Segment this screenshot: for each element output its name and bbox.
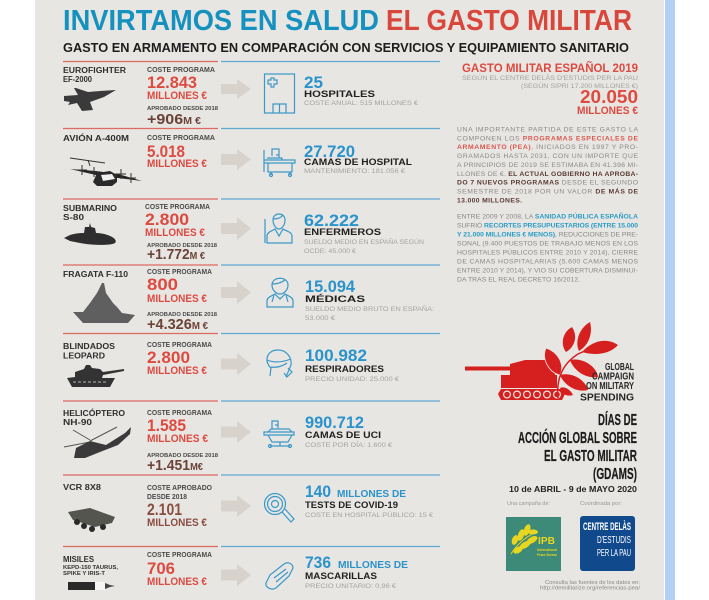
row: A400M	[63, 134, 412, 186]
cost: VCR: DESDE 2018	[147, 494, 187, 501]
logo: Centre Delàs: D'ESTUDIS	[597, 534, 631, 546]
icon: frigate	[73, 283, 135, 323]
blue side band	[665, 0, 675, 600]
organisers captions	[507, 501, 622, 507]
text block: armament programmes	[457, 126, 638, 204]
heading: days of global action: EL GASTO MILITAR	[544, 448, 637, 465]
logo wordmark: GLOBAL	[605, 362, 634, 373]
icon: armoured vehicle	[68, 508, 115, 532]
cost: Eurofighter: APROBADO DESDE 2018	[147, 106, 218, 112]
label: submarine: SUBMARINO	[63, 204, 117, 213]
equivalent: masks: PRECIO UNITARIO: 0,96 €	[305, 583, 396, 590]
equivalent: hospitals: HOSPITALES	[304, 89, 375, 100]
cost: missiles: 706	[147, 559, 175, 578]
equivalent: masks	[305, 553, 408, 590]
equivalent: COVID tests: COSTE EN HOSPITAL PÚBLICO: 15 €	[305, 510, 433, 519]
panel: Spanish military spending 2019: (SEGÚN SIPRI 17.200 MILLONES €)	[521, 81, 638, 90]
equivalent: nurses: ENFERMEROS	[304, 227, 381, 238]
icon: helicopter	[64, 427, 131, 458]
cost: A400M	[147, 135, 215, 170]
cost: Eurofighter: +906M €	[147, 111, 201, 128]
row: Leopard tank	[63, 342, 399, 387]
cost: Leopard	[147, 342, 212, 377]
title: EL GASTO MILITAR	[386, 5, 632, 37]
icon: ICU bed	[264, 421, 294, 448]
cost: missiles	[147, 552, 212, 588]
label: Leopard: BLINDADOS	[63, 342, 116, 351]
heading: days of global action: (GDAMS)	[593, 466, 637, 483]
icon: transport plane	[70, 158, 142, 186]
label: helicopter	[63, 409, 125, 427]
arrow	[221, 149, 251, 170]
cost: frigate: APROBADO DESDE 2018	[147, 312, 217, 318]
organisers captions: Una campaña de:	[507, 501, 550, 507]
equivalent: ICU beds: COSTE POR DÍA: 1.600 €	[305, 440, 392, 449]
logo: IPB: IPB	[538, 536, 555, 547]
icon: face mask	[266, 563, 293, 589]
logo: IPB	[506, 517, 561, 571]
text block: public health cuts: DE CAMAS HOSPITALARIAS (5.600 CAMAS MENOS	[457, 258, 638, 266]
organisers captions: Coordinada por:	[580, 501, 622, 507]
label: Eurofighter	[63, 66, 126, 84]
icon: magnifier	[264, 494, 294, 522]
sources note: http://demilitarize.org/referencias-pea/	[540, 586, 641, 592]
cost: helicopter	[147, 410, 218, 474]
row: frigate	[63, 269, 434, 333]
cost: missiles: COSTE PROGRAMA	[147, 552, 212, 559]
cost: submarine: APROBADO DESDE 2018	[147, 243, 217, 249]
icon: hospital	[264, 74, 294, 113]
text block: armament programmes: GRAMADOS HASTA 2031, CON UN IMPORTE QUE	[457, 153, 638, 160]
cost: helicopter: APROBADO DESDE 2018	[147, 453, 218, 459]
equivalent: doctors: 53.000 €	[305, 315, 335, 322]
equivalent: COVID tests: TESTS DE COVID-19	[305, 500, 398, 511]
equivalent: nurses	[304, 211, 424, 255]
cost: submarine: MILLONES €	[145, 227, 205, 239]
label: helicopter: HELICÓPTERO	[63, 409, 125, 418]
equivalent: doctors	[305, 277, 434, 322]
logo wordmark: CAMPAIGN	[592, 372, 634, 382]
heading: days of global action: DÍAS DE	[598, 410, 637, 429]
icon: submarine	[64, 223, 116, 245]
title: INVIRTAMOS EN SALUD	[63, 5, 379, 37]
label: missiles	[63, 555, 119, 577]
panel: Spanish military spending 2019: MILLONES €	[577, 105, 638, 117]
text block: public health cuts: DA TRAS EL REAL DECRETO 16/2012.	[457, 276, 580, 284]
row: missiles	[63, 552, 408, 590]
icon: nurse	[265, 214, 292, 243]
subtitle: GASTO EN ARMAMENTO EN COMPARACIÓN CON SERVICIOS Y EQUIPAMIENTO SANITARIO	[63, 40, 629, 55]
cost: frigate: MILLONES €	[147, 293, 207, 305]
logo: Centre Delàs	[580, 516, 635, 571]
arrow	[221, 421, 251, 443]
cost: helicopter: COSTE PROGRAMA	[147, 410, 212, 417]
cost: Leopard: MILLONES €	[147, 365, 207, 377]
text block: public health cuts: HOSPITALES PÚBLICOS ENTRE 2010 Y 2014), CIERRE	[457, 248, 638, 256]
icon: tank	[67, 365, 124, 387]
equivalent: COVID tests: MILLONES DE	[337, 489, 406, 500]
equivalent: hospitals: 25	[304, 73, 323, 92]
label: Leopard: LEOPARD	[63, 352, 105, 360]
cost: VCR: MILLONES €	[147, 517, 207, 529]
cost: frigate: 800	[147, 275, 178, 294]
title	[63, 5, 632, 37]
text block: public health cuts: SONAL (9.400 PUESTOS DE TRABAJO MENOS EN LOS	[457, 240, 638, 248]
equivalent: hospitals: COSTE ANUAL: 515 MILLONES €	[304, 100, 418, 107]
heading: days of global action	[518, 410, 637, 483]
cost: Eurofighter: 12.843	[147, 73, 197, 92]
equivalent: nurses: 62.222	[304, 211, 359, 230]
equivalent: masks: MASCARILLAS	[305, 571, 377, 582]
cost: helicopter: 1.585	[147, 416, 186, 435]
label: helicopter: NH-90	[63, 418, 93, 427]
cost: helicopter: MILLONES €	[147, 433, 208, 445]
arrow	[221, 79, 251, 99]
icon: hospital bed	[264, 149, 295, 176]
cost: frigate: +4.326M €	[147, 316, 208, 333]
equivalent: hospital beds: 27.720	[304, 142, 355, 161]
label: Eurofighter: EF-2000	[63, 75, 93, 84]
equivalent: masks: 736	[305, 553, 331, 572]
text block: public health cuts: ENTRE 2009 Y 2008, LA SANIDAD PÚBLICA ESPAÑOLA	[457, 212, 638, 220]
equivalent: doctors: SUELDO MEDIO BRUTO EN ESPAÑA:	[305, 304, 434, 313]
cost: VCR	[147, 485, 213, 529]
cost: Eurofighter	[147, 67, 218, 128]
arrow	[221, 495, 251, 517]
text block: armament programmes: UNA IMPORTANTE PARTIDA DE ESTE GASTO LA	[457, 126, 638, 134]
text block: armament programmes: A PRINCIPIOS DE 2019 SE ESTIMABA EN 41.396 MI-	[457, 162, 638, 169]
logo: IPB: International	[537, 548, 557, 552]
cost: Eurofighter: MILLONES €	[147, 90, 207, 102]
logo wordmark	[580, 362, 634, 404]
text block: armament programmes: 13.000 MILLONES.	[457, 197, 522, 204]
cost: A400M: COSTE PROGRAMA	[147, 135, 215, 142]
equivalent: nurses: OCDE: 45.000 €	[304, 248, 356, 255]
icon: missile	[68, 582, 115, 590]
equivalent: COVID tests: 140	[305, 482, 331, 501]
icon: red tank with olive branch	[465, 322, 618, 400]
cost: A400M: MILLONES €	[147, 158, 207, 170]
text block: public health cuts: SUFRIÓ RECORTES PRESUPUESTARIOS (ENTRE 15.000	[457, 220, 638, 230]
text block: public health cuts	[457, 212, 638, 284]
panel: Spanish military spending 2019: SEGÚN EL CENTRE DELÀS D'ESTUDIS PER LA PAU	[462, 73, 638, 82]
cost: submarine	[145, 204, 217, 263]
equivalent: ICU beds	[305, 413, 392, 449]
label: Eurofighter: EUROFIGHTER	[63, 66, 126, 75]
cost: Leopard: COSTE PROGRAMA	[147, 342, 212, 349]
cost: helicopter: +1.451M€	[147, 457, 203, 474]
label: missiles: KEPD-150 TAURUS,	[63, 565, 119, 571]
text block: armament programmes: LLONES DE €. EL ACTUAL GOBIERNO HA APROBA-	[457, 171, 638, 178]
cost: submarine: 2.800	[145, 210, 189, 229]
label: frigate: FRAGATA F-110	[63, 270, 129, 279]
cost: A400M: 5.018	[147, 142, 185, 161]
cost: submarine: COSTE PROGRAMA	[145, 204, 210, 211]
logo wordmark: SPENDING	[580, 392, 634, 404]
dates: 10 de ABRIL - 9 de MAYO 2020	[509, 484, 637, 494]
equivalent: doctors: MÉDICAS	[305, 294, 365, 305]
text block: armament programmes: DO 7 NUEVOS PROGRAMAS DESDE EL SEGUNDO	[457, 180, 638, 187]
equivalent: hospital beds: MANTENIMIENTO: 181.056 €	[304, 168, 405, 175]
label: missiles: SPIKE Y IRIS-T	[63, 571, 105, 577]
logo: Global Campaign on Military Spending	[465, 322, 634, 404]
panel: Spanish military spending 2019: GASTO MILITAR ESPAÑOL 2019	[462, 62, 638, 75]
label: missiles: MISILES	[63, 555, 95, 564]
cost: VCR: 2.101	[147, 500, 182, 519]
equivalent: hospital beds: CAMAS DE HOSPITAL	[304, 157, 412, 168]
icon: respirator	[267, 350, 292, 377]
equivalent: respirators: PRECIO UNIDAD: 25.000 €	[305, 376, 399, 383]
arrow	[221, 281, 251, 304]
sources note: Consulta las fuentes de los datos en:	[545, 580, 640, 586]
label: A400M: AVIÓN A-400M	[63, 134, 129, 143]
cost: missiles: MILLONES €	[147, 576, 207, 588]
label: submarine: S-80	[63, 213, 85, 222]
sources note	[540, 580, 641, 592]
row: Eurofighter	[63, 66, 418, 128]
panel: Spanish military spending 2019	[462, 62, 638, 117]
row: helicopter	[63, 409, 392, 474]
cost: submarine: +1.772M €	[147, 246, 205, 263]
equivalent: hospitals	[304, 73, 418, 107]
label: Leopard	[63, 342, 116, 360]
icon: doctor	[267, 278, 293, 307]
equivalent: doctors: 15.094	[305, 277, 356, 296]
icon: fighter jet	[64, 88, 116, 111]
arrow	[221, 564, 251, 586]
equivalent: hospital beds	[304, 142, 412, 175]
text block: public health cuts: Y 21.000 MILLONES € MENOS), REDUCCIONES DE PRE-	[457, 232, 638, 238]
logo: Centre Delàs: CENTRE DELÀS	[583, 520, 631, 533]
label: submarine	[63, 204, 117, 222]
text block: public health cuts: ENTRE 2010 Y 2014), Y VIO SU COBERTURA DISMINUI-	[457, 268, 638, 274]
heading: days of global action: ACCIÓN GLOBAL SOBRE	[518, 428, 637, 447]
cost: VCR: COSTE APROBADO	[147, 485, 213, 492]
cost: frigate: COSTE PROGRAMA	[147, 269, 212, 276]
equivalent: COVID tests	[305, 482, 433, 519]
equivalent: masks: MILLONES DE	[338, 560, 408, 571]
logo wordmark: ON MILITARY	[586, 381, 634, 392]
arrow	[221, 217, 251, 240]
cost: Leopard: 2.800	[147, 348, 190, 367]
panel: Spanish military spending 2019: 20.050	[580, 87, 638, 107]
equivalent: respirators	[305, 346, 399, 383]
text block: armament programmes: SEMESTRE DE 2018 POR UN VALOR DE MÁS DE	[457, 186, 638, 196]
equivalent: nurses: SUELDO MEDIO EN ESPAÑA SEGÚN	[304, 237, 424, 246]
cost: frigate	[147, 269, 217, 333]
equivalent: ICU beds: 990.712	[305, 413, 364, 432]
equivalent: respirators: RESPIRADORES	[305, 364, 384, 375]
logo: Centre Delàs: PER LA PAU	[597, 547, 631, 559]
text block: armament programmes: ARMAMENTO (PEA), INICIADOS EN 1997 Y PRO-	[457, 144, 638, 151]
cost: Eurofighter: COSTE PROGRAMA	[147, 67, 215, 74]
label: VCR: VCR 8X8	[63, 483, 102, 492]
equivalent: ICU beds: CAMAS DE UCI	[305, 430, 381, 441]
arrow	[221, 353, 251, 375]
row: VCR 8x8	[63, 482, 433, 532]
equivalent: respirators: 100.982	[305, 346, 367, 365]
row: submarine	[63, 204, 424, 263]
text block: armament programmes: COMPONEN LOS PROGRAMAS ESPECIALES DE	[457, 135, 638, 142]
logo: IPB: Peace Bureau	[537, 553, 557, 557]
